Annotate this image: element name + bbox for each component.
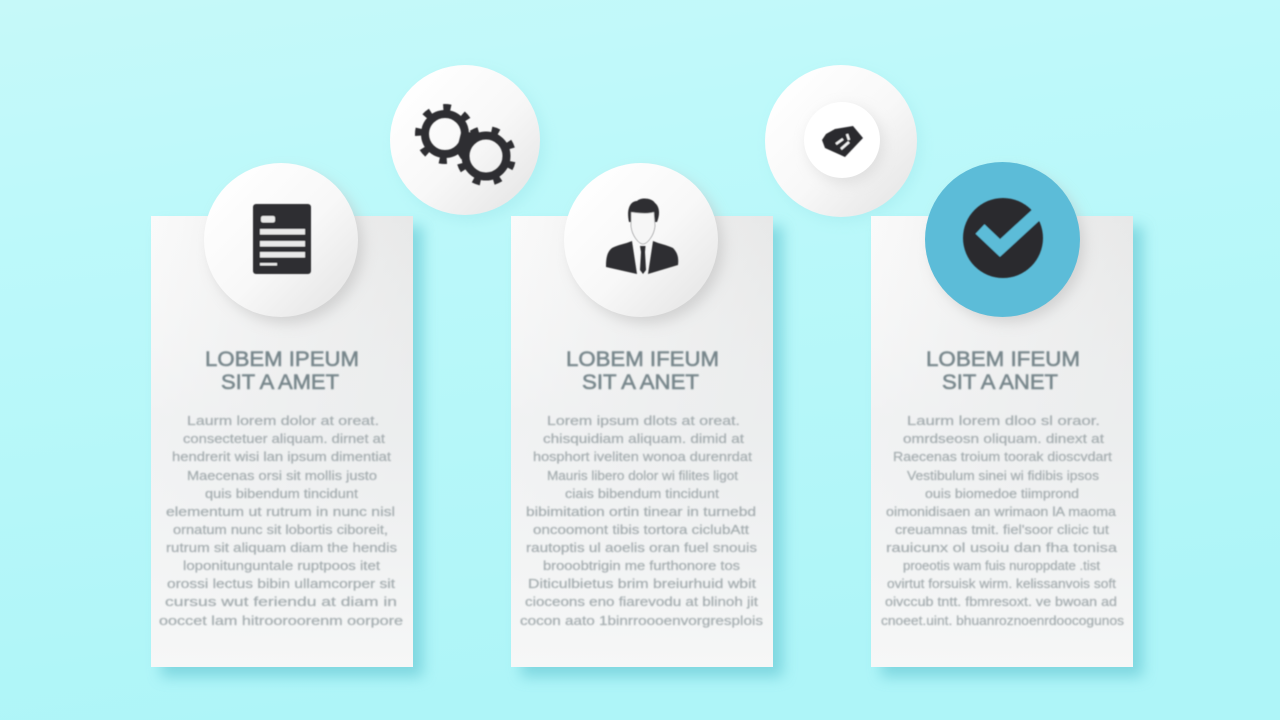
card 2 heading: SIT A ANET: [582, 371, 699, 394]
icon disc: checkmark: [925, 162, 1084, 322]
icon: check circle: [963, 198, 1043, 278]
icon: document: [253, 204, 311, 274]
icon disc: tag: [765, 65, 920, 221]
card 3 body text: cnoeet.uint. bhuanroznoenrdoocogunos: [881, 614, 1124, 628]
card 1 heading: [205, 348, 359, 394]
card 2 heading: [566, 348, 719, 394]
card 2 body text: oncoomont tibis tortora ciclubAtt: [533, 523, 750, 537]
card 3 body text: oimonidisaen an wrimaon lA maoma: [886, 505, 1116, 519]
card 3 body text: ouis biomedoe tiimprond: [925, 487, 1079, 501]
card 1 body text: [159, 414, 403, 628]
icon: tag: [822, 126, 863, 157]
icon disc: businessman: [564, 163, 723, 323]
card 1 body text: Maecenas orsi sit mollis justo: [187, 469, 377, 483]
card 1 body text: orossi lectus bibin ullamcorper sit: [167, 577, 396, 591]
icon: gears: [417, 106, 517, 187]
card 3 body text: [881, 414, 1124, 628]
icon disc: document: [204, 163, 363, 323]
card 2 body text: Lorem ipsum dlots at oreat.: [547, 414, 740, 428]
card 3 body text: Vestibulum sinei wi fidibis ipsos: [907, 469, 1099, 483]
icon disc: gears: [390, 65, 545, 221]
card 2 body text: cocon aato 1binrroooenvorgresplois: [520, 614, 763, 628]
card 2 body text: cioceons eno fiarevodu at blinoh jit: [525, 595, 759, 609]
card 2 body text: Mauris libero dolor wi filites ligot: [547, 469, 739, 483]
card 3 heading: LOBEM IFEUM: [926, 348, 1080, 371]
card 1 body text: ornatum nunc sit lobortis ciboreit,: [173, 523, 388, 537]
card 2 body text: Diticulbietus brim breiurhuid wbit: [528, 577, 757, 591]
card 1 body text: hendrerit wisi lan ipsum dimentiat: [172, 450, 392, 464]
card 3 body text: Raecenas troium toorak dioscvdart: [893, 450, 1113, 464]
card 1 body text: cursus wut feriendu at diam in: [165, 595, 397, 609]
card 3 body text: Laurm lorem dloo sl oraor.: [907, 414, 1100, 428]
card 1 heading: LOBEM IPEUM: [205, 348, 359, 371]
panel: card 3: [871, 216, 1143, 677]
card 2 body text: hosphort iveliten wonoa durenrdat: [533, 450, 753, 464]
card 3 body text: rauicunx ol usoiu dan fha tonisa: [886, 541, 1117, 555]
card 1 body text: quis bibendum tincidunt: [205, 487, 359, 501]
card 2 heading: LOBEM IFEUM: [566, 348, 719, 371]
card 1 heading: SIT A AMET: [221, 371, 339, 394]
card 1 body text: loponitunguntale ruptpoos itet: [183, 559, 381, 573]
card 2 body text: ciais bibendum tincidunt: [565, 487, 720, 501]
card 2 body text: [520, 414, 763, 628]
card 1 body text: consectetuer aliquam. dirnet at: [183, 432, 386, 446]
card 2 body text: bibimitation ortin tinear in turnebd: [526, 505, 756, 519]
card 2 body text: brooobtrigin me furthonore tos: [543, 559, 740, 573]
card 3 body text: omrdseosn oliquam. dinext at: [903, 432, 1105, 446]
card 1 body text: Laurm lorem dolor at oreat.: [187, 414, 379, 428]
card 3 heading: [926, 348, 1080, 394]
card 3 heading: SIT A ANET: [942, 371, 1058, 394]
card 1 body text: elementum ut rutrum in nunc nisl: [166, 505, 395, 519]
card 2 body text: chisquidiam aliquam. dimid at: [543, 432, 745, 446]
card 1 body text: rutrum sit aliquam diam the hendis: [166, 541, 397, 555]
card 3 body text: creuamnas tmit. fiel'soor clicic tut: [895, 523, 1110, 537]
card 2 body text: rautoptis ul aoelis oran fuel snouis: [526, 541, 757, 555]
card 3 body text: oivccub tntt. fbmresoxt. ve bwoan ad: [885, 595, 1117, 609]
icon: businessman: [606, 199, 678, 274]
panel: card 1: [151, 216, 423, 677]
card 1 body text: ooccet lam hitrooroorenm oorpore: [159, 614, 403, 628]
card 3 body text: ovirtut forsuisk wirm. kelissanvois soft: [887, 577, 1117, 591]
card 3 body text: proeotis wam fuis nuroppdate .tist: [903, 559, 1101, 573]
panel: card 2: [511, 216, 783, 677]
